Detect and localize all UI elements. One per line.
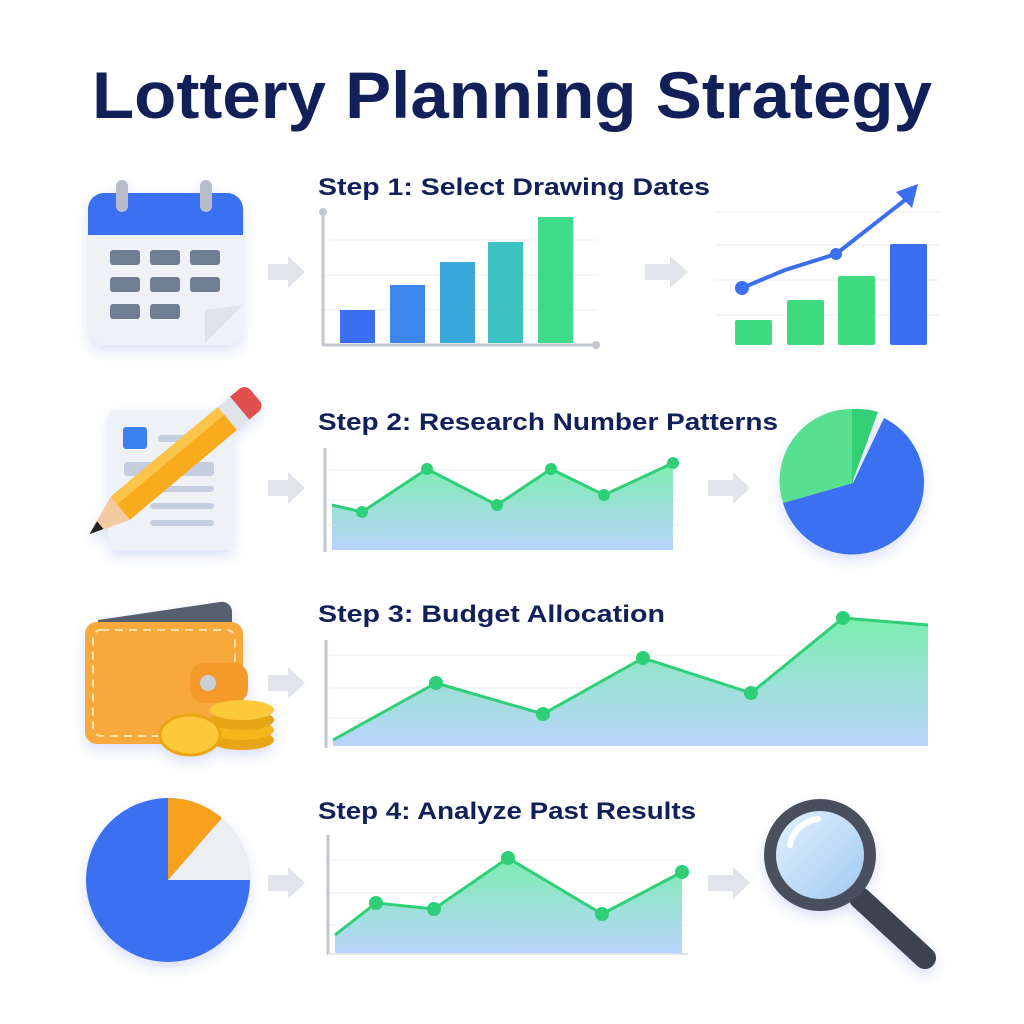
arrow 4b <box>708 867 750 899</box>
arrow 1b <box>645 256 688 288</box>
icon: wallet with coins <box>85 602 274 755</box>
chart: step 4 line <box>325 835 689 955</box>
chart: step 3 area <box>325 611 928 748</box>
heading: step 1: Step 1: Select Drawing Dates <box>318 174 710 201</box>
icon: pie chart <box>86 798 250 962</box>
icon: document and pencil <box>80 384 265 550</box>
arrow 4a <box>268 867 305 899</box>
chart: step 1 growth <box>715 184 940 345</box>
icon: calendar <box>88 180 243 345</box>
chart: step 1 bars <box>319 208 600 349</box>
heading: step 3: Step 3: Budget Allocation <box>318 601 665 628</box>
title: Lottery Planning Strategy <box>92 58 932 132</box>
arrow 1a <box>268 256 305 288</box>
heading: step 2: Step 2: Research Number Patterns <box>318 409 778 436</box>
arrow 2a <box>268 472 305 504</box>
icon: magnifying glass <box>770 805 925 958</box>
arrow 2b <box>708 472 750 504</box>
chart: step 2 pie <box>780 409 924 555</box>
chart: step 2 line <box>325 448 680 552</box>
heading: step 4: Step 4: Analyze Past Results <box>318 798 696 825</box>
arrow 3 <box>268 667 305 699</box>
